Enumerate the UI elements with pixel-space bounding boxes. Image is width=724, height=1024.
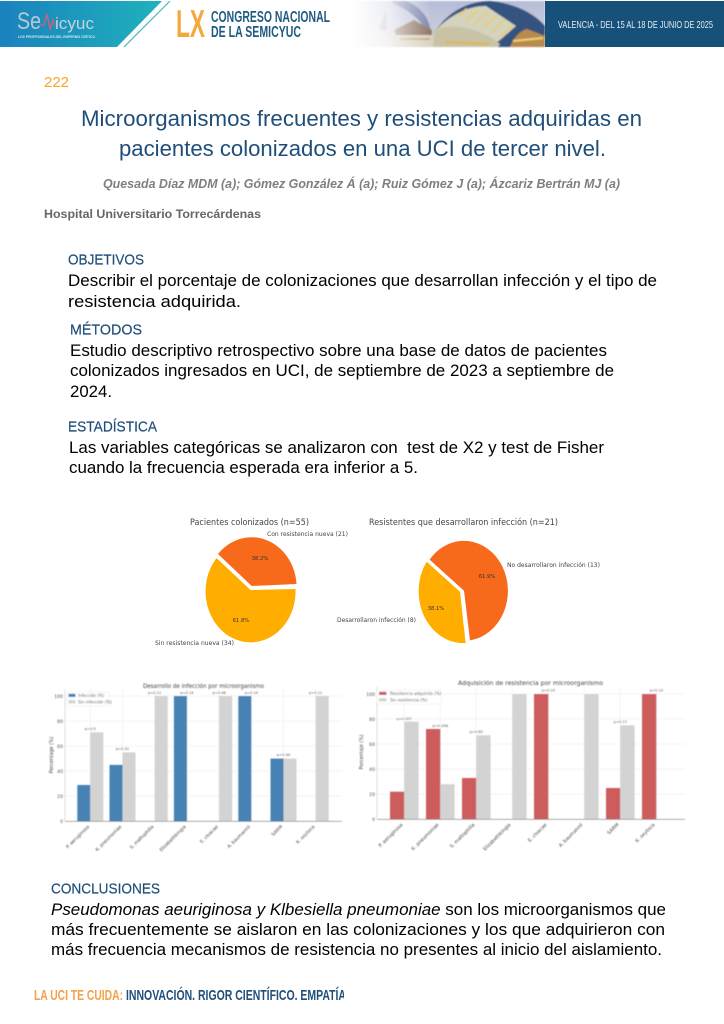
- pie chart: pacientes colonizados: 61.8%: [233, 618, 249, 624]
- pie chart: resistentes que desarrollaron infección: 38.1%: [428, 606, 444, 612]
- bar chart: desarrollo de infección: K. pneumoniae: [94, 824, 123, 853]
- bar chart: adquisición de resistencia: K. pneumoniae: [411, 822, 440, 852]
- bar chart: desarrollo de infección: 40: [57, 769, 63, 775]
- title: pacientes colonizados en una UCI de tercer nivel.: [119, 136, 606, 161]
- section: objetivos: resistencia adquirida.: [68, 293, 241, 311]
- section: métodos: [70, 322, 614, 401]
- bar chart: desarrollo de infección: P. aeruginosa: [65, 824, 91, 850]
- bar chart: adquisición de resistencia: Sin resistencia (%): [390, 698, 428, 702]
- congress title: [176, 3, 330, 46]
- bar chart: desarrollo de infección: 80: [57, 719, 63, 725]
- bar chart: desarrollo de infección: 60: [57, 744, 63, 750]
- bar chart: adquisición de resistencia: p=0.19: [542, 688, 556, 692]
- bar chart: adquisición de resistencia: 100: [366, 692, 375, 698]
- congress title: LX: [176, 3, 205, 46]
- pie chart: pacientes colonizados: Pacientes colonizados (n=55): [190, 518, 309, 528]
- bar chart: desarrollo de infección: p=0.31: [116, 747, 129, 751]
- section: métodos: Estudio descriptivo retrospectivo sobre una base de datos de pacientes: [70, 342, 607, 360]
- bar chart: adquisición de resistencia: A. baumannii: [558, 822, 584, 849]
- bar chart: desarrollo de infección: p=0.44: [277, 753, 291, 757]
- section: conclusiones: CONCLUSIONES: [51, 880, 160, 898]
- semicyuc logo panel: LOS PROFESIONALES DEL ENFERMO CRÍTICO: [18, 34, 96, 39]
- bar chart: adquisición de resistencia: p=0.13: [650, 688, 663, 692]
- section: estadística: [68, 418, 605, 477]
- bar chart: desarrollo de infección: p=0.11: [148, 691, 161, 695]
- bar chart: desarrollo de infección: 0: [60, 819, 63, 825]
- bar chart: desarrollo de infección: p=0.11: [309, 691, 322, 695]
- bar chart: desarrollo de infección: p=0.5: [85, 727, 96, 731]
- section: estadística: Las variables categóricas se analizaron con test de X2 y test de Fisher: [69, 439, 605, 457]
- section: objetivos: [68, 252, 657, 311]
- bar chart: adquisición de resistencia: p=0.008: [433, 724, 449, 728]
- pie chart: pacientes colonizados: Con resistencia nueva (21): [267, 531, 348, 538]
- bar chart: adquisición de resistencia: [359, 679, 685, 852]
- pie chart: resistentes que desarrollaron infección: Resistentes que desarrollaron infección (n=21): [369, 517, 558, 528]
- bar chart: adquisición de resistencia: 80: [369, 717, 375, 723]
- date panel: [545, 1, 724, 47]
- semicyuc logo panel: icyuc: [55, 14, 95, 33]
- section: métodos: 2024.: [70, 383, 112, 401]
- pie chart: resistentes que desarrollaron infección: 61.9%: [479, 574, 495, 580]
- bar chart: adquisición de resistencia: p=0.007: [397, 717, 412, 721]
- bar chart: desarrollo de infección: 100: [54, 694, 63, 700]
- bar chart: desarrollo de infección: SARM: [270, 824, 284, 838]
- bar chart: adquisición de resistencia: S. maltophilia: [449, 822, 476, 850]
- bar chart: desarrollo de infección: S. maltophilia: [129, 824, 155, 851]
- section: conclusiones: más frecuentemente se aislaron en las colonizaciones y los que adquirieron con: [51, 921, 665, 939]
- bar chart: adquisición de resistencia: Resistencia adquirida (%): [390, 691, 441, 696]
- bar chart: desarrollo de infección: p=0.14: [245, 691, 259, 695]
- pie chart: resistentes que desarrollaron infección: Desarrollaron infección (8): [337, 616, 416, 624]
- bar chart: desarrollo de infección: 20: [57, 794, 63, 800]
- section: métodos: MÉTODOS: [70, 322, 142, 338]
- bar chart: desarrollo de infección: K. oxytoca: [295, 824, 316, 845]
- authors: Quesada Díaz MDM (a); Gómez González Á (a); Ruiz Gómez J (a); Ázcariz Bertrán MJ (a): [103, 176, 620, 191]
- bar chart: adquisición de resistencia: SARM: [606, 822, 620, 836]
- bar chart: desarrollo de infección: A. baumannii: [226, 824, 252, 850]
- bar chart: desarrollo de infección: Desarrollo de infección por microorganismo: [143, 682, 264, 690]
- section: estadística: cuando la frecuencia esperada era inferior a 5.: [69, 459, 418, 477]
- section: objetivos: Describir el porcentaje de colonizaciones que desarrollan infección y el tipo de: [68, 272, 657, 290]
- pie chart: resistentes que desarrollaron infección: [337, 517, 600, 643]
- bar chart: adquisición de resistencia: Elizabethkingia: [482, 822, 512, 852]
- pie chart: pacientes colonizados: [155, 518, 348, 647]
- footer slogan: INNOVACIÓN. RIGOR CIENTÍFICO. EMPATÍA: [126, 986, 346, 1004]
- title: [81, 106, 642, 161]
- footer slogan: [34, 986, 344, 1000]
- bar chart: adquisición de resistencia: P. aeruginosa: [378, 822, 404, 849]
- bar chart: adquisición de resistencia: K. oxytoca: [634, 822, 656, 844]
- hospital: Hospital Universitario Torrecárdenas: [44, 207, 261, 221]
- bar chart: adquisición de resistencia: 0: [372, 817, 375, 823]
- bar chart: adquisición de resistencia: p=0.65: [470, 730, 483, 734]
- bar chart: desarrollo de infección: E. cloacae: [199, 824, 220, 845]
- bar chart: adquisición de resistencia: 20: [369, 792, 375, 798]
- bar chart: desarrollo de infección: Percentage (%): [49, 736, 55, 773]
- bar chart: desarrollo de infección: p=0.48: [212, 691, 226, 695]
- semicyuc logo panel: [0, 1, 170, 47]
- bar chart: adquisición de resistencia: Porcentaje (%): [359, 734, 365, 770]
- section: conclusiones: Pseudomonas aeuriginosa y Klbesiella pneumoniae son los microorganismos que: [51, 901, 666, 919]
- bar chart: desarrollo de infección: Elizabethkingia: [159, 824, 188, 853]
- section: estadística: ESTADÍSTICA: [68, 418, 157, 436]
- bar chart: desarrollo de infección: Infección (%): [78, 693, 105, 698]
- bar chart: adquisición de resistencia: E. cloacae: [527, 822, 548, 844]
- footer slogan: LA UCI TE CUIDA:: [34, 987, 123, 1004]
- bar chart: desarrollo de infección: [49, 682, 342, 853]
- bar chart: adquisición de resistencia: 60: [369, 742, 375, 748]
- bar chart: adquisición de resistencia: 40: [369, 767, 375, 773]
- pie chart: pacientes colonizados: Sin resistencia nueva (34): [155, 640, 234, 647]
- header banner: [0, 1, 724, 47]
- pie chart: resistentes que desarrollaron infección: No desarrollaron infección (13): [507, 561, 600, 569]
- section: objetivos: OBJETIVOS: [68, 252, 144, 268]
- congress title: DE LA SEMICYUC: [211, 24, 301, 41]
- bar chart: adquisición de resistencia: p=0.17: [614, 720, 627, 724]
- bar chart: adquisición de resistencia: Adquisición de resistencia por microorganismo: [458, 679, 603, 687]
- pie chart: pacientes colonizados: 38.2%: [252, 556, 268, 562]
- title: Microorganismos frecuentes y resistencias adquiridas en: [81, 106, 642, 131]
- abstract number: 222: [44, 74, 69, 91]
- congress title: CONGRESO NACIONAL: [211, 9, 330, 26]
- section: conclusiones: [51, 880, 666, 959]
- semicyuc logo panel: Se: [17, 8, 41, 35]
- section: conclusiones: más frecuencia mecanismos de resistencia no presentes al inicio del aislamiento.: [51, 941, 662, 959]
- section: métodos: colonizados ingresados en UCI, de septiembre de 2023 a septiembre de: [70, 362, 614, 380]
- bar chart: desarrollo de infección: Sin infección (%): [78, 700, 112, 704]
- bar chart: desarrollo de infección: p=0.14: [180, 691, 194, 695]
- photo: Valencia architecture: [352, 1, 545, 47]
